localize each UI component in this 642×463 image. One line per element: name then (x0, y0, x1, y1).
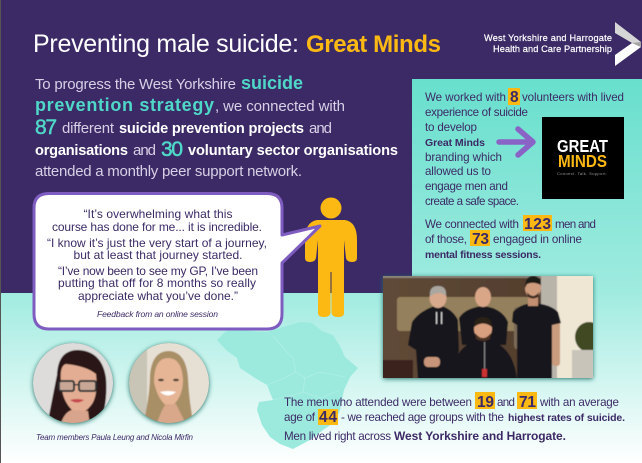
volunteers text: to develop (425, 121, 477, 134)
volunteers text (425, 89, 624, 208)
intro text block: 87 (35, 116, 57, 139)
highlight: 8 (508, 88, 520, 105)
quote 1 (52, 207, 262, 234)
quote 3: putting that off for 8 months so really (58, 276, 256, 290)
age range text: 19 (477, 394, 494, 411)
plant (574, 322, 593, 351)
chevron mark (615, 22, 641, 66)
intro text block: voluntary sector organisations (188, 143, 398, 159)
age range text: 71 (519, 394, 536, 411)
arrow to logo (499, 129, 533, 155)
intro text block: , we connected with (215, 98, 345, 115)
Great Minds logo: GREAT (557, 136, 608, 156)
intro text block: suicide (241, 73, 303, 93)
connected text: We connected with (425, 218, 519, 231)
team caption: Team members Paula Leung and Nicola Mirfin (36, 433, 194, 442)
quote 2: but at least that journey started. (74, 248, 242, 262)
volunteers text: engage men and (425, 180, 508, 193)
intro text block: 30 (161, 138, 183, 161)
intro text block: and (133, 142, 156, 159)
title: Great Minds (306, 31, 441, 58)
age range text: - we reached age groups with the (341, 411, 504, 424)
team member photo: Nicola Mirfin (126, 340, 212, 426)
age range text: with an average (539, 396, 619, 409)
intro text block: and (309, 120, 332, 137)
Great Minds logo: MINDS (558, 151, 607, 171)
volunteers text: Great Minds (425, 137, 485, 149)
Great Minds logo: Connect. Talk. Support. (557, 171, 607, 176)
intro text block: different (62, 120, 115, 137)
volunteers text: volunteers with lived (522, 91, 624, 104)
connected text: engaged in online (493, 233, 582, 246)
connected text: 73 (472, 231, 489, 248)
volunteers text: experience of suicide (425, 106, 528, 119)
age range text: Men lived right across (284, 430, 391, 443)
volunteers text: create a safe space. (425, 195, 519, 208)
intro text block: suicide prevention projects (119, 121, 304, 137)
title (33, 30, 441, 58)
quote 3: appreciate what you’ve done.” (78, 289, 238, 303)
quote 3 (58, 264, 258, 303)
volunteers text: 8 (510, 89, 519, 106)
man standing left (408, 286, 459, 380)
intro text block: attended a monthly peer support network. (35, 163, 302, 180)
team photo (380, 273, 603, 381)
quote 2 (47, 236, 267, 262)
title: Preventing male suicide: (33, 30, 299, 58)
age range text: and (497, 396, 515, 409)
age range text: 44 (319, 409, 337, 426)
connected text: mental fitness sessions. (425, 249, 541, 261)
connected text: 123 (524, 216, 551, 233)
quote 1: course has done for me... it is incredible. (52, 220, 262, 234)
volunteers text: We worked with (425, 91, 506, 104)
age range text: age of (284, 411, 316, 424)
wall art (397, 297, 533, 331)
intro text block: prevention strategy (35, 95, 214, 115)
volunteers text: allowed us to (425, 165, 491, 178)
connected text (425, 216, 596, 261)
partnership name: West Yorkshire and Harrogate (484, 33, 612, 43)
age range text: West Yorkshire and Harrogate. (394, 429, 566, 443)
map of West Yorkshire and Harrogate (217, 322, 358, 449)
partnership name (484, 33, 612, 54)
speech bubble (34, 194, 320, 329)
connected text: of those, (425, 233, 467, 246)
age range text (284, 394, 625, 443)
highlights: 123 and 73 (470, 215, 552, 246)
age highlights (318, 392, 537, 425)
intro text block: organisations (35, 143, 128, 159)
volunteers text: branding which (425, 151, 502, 164)
age range text: highest rates of suicide. (508, 412, 625, 424)
quote 1: “It’s overwhelming what this (84, 207, 232, 221)
panel: right teal background (412, 79, 642, 294)
intro text block (35, 73, 398, 180)
panel: Great Minds volunteers (425, 88, 624, 261)
team member photo: Paula Leung (30, 340, 116, 426)
quote 2: “I know it’s just the very start of a journey, (47, 236, 267, 250)
intro text block: To progress the West Yorkshire (35, 76, 236, 93)
quote attribution: Feedback from an online session (97, 309, 218, 319)
connected text: men and (555, 218, 596, 231)
quote 3: “I’ve now been to see my GP, I’ve been (58, 264, 258, 278)
wall and column (541, 273, 557, 381)
partnership logo (484, 22, 641, 66)
partnership name: Health and Care Partnership (493, 44, 612, 54)
Great Minds logo (542, 117, 624, 199)
age range text: The men who attended were between (284, 396, 472, 409)
man standing right (512, 276, 561, 380)
man seated front (452, 317, 517, 380)
man standing middle (459, 287, 508, 345)
icon: person (305, 198, 357, 317)
